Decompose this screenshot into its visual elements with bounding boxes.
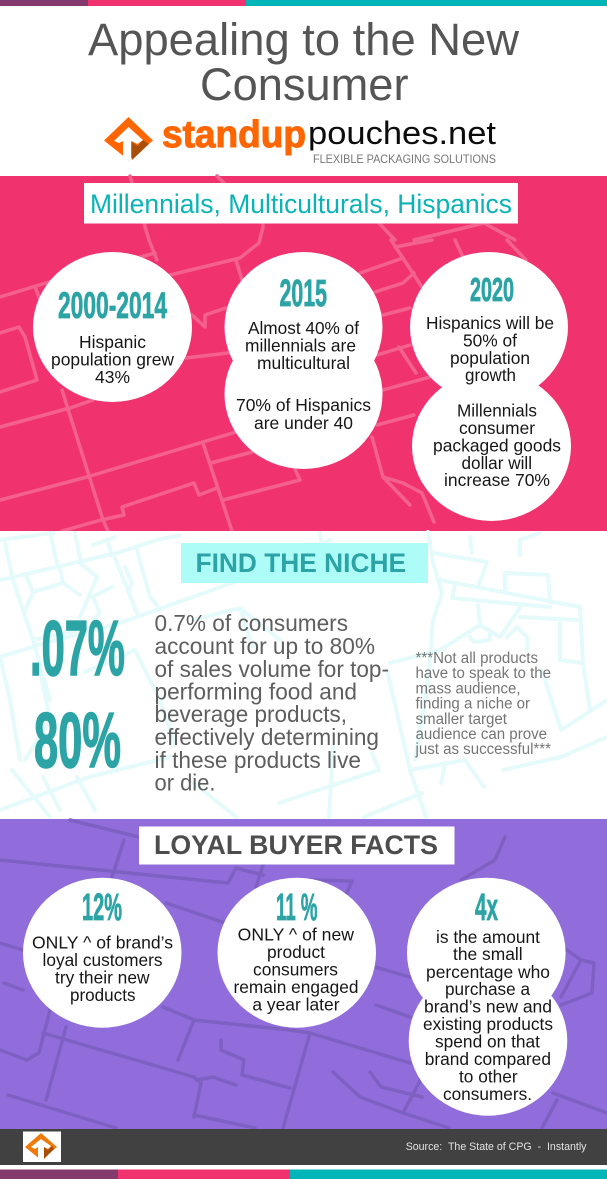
circle: 4x: is the amount (436, 927, 540, 947)
circle: 2000-2014: Hispanic (79, 332, 146, 352)
circle: 4x: purchase a (445, 979, 530, 999)
side note: smaller target (416, 711, 508, 728)
main paragraph: beverage products, (154, 701, 347, 727)
panel: millennials, multiculturals, hispanics (0, 176, 607, 531)
circle: 4x: consumers. (443, 1084, 532, 1104)
section heading: Millennials, Multiculturals, Hispanics (90, 189, 512, 219)
footer logo (23, 1132, 61, 1162)
side note (415, 650, 551, 758)
title: Consumer (200, 59, 409, 110)
side note: audience can prove (416, 726, 547, 743)
title (88, 14, 519, 110)
main paragraph: or die. (154, 770, 216, 796)
circle: 2020: population (450, 348, 530, 368)
footer (0, 1129, 607, 1165)
circle: 2000-2014: 43% (95, 367, 130, 387)
title: Appealing to the New (88, 14, 519, 65)
circle: 4x: to other (459, 1067, 518, 1087)
tagline: FLEXIBLE PACKAGING SOLUTIONS (313, 152, 496, 166)
circle: 2020: consumer (459, 418, 535, 438)
circle: 2020 (410, 252, 571, 521)
circle: 11%: remain engaged (234, 977, 358, 997)
circle: 2015: millennials are (245, 336, 356, 356)
circle: 12%: 12% (82, 887, 122, 929)
circle: 2000-2014: 2000-2014 (58, 285, 167, 326)
main paragraph: effectively determining (154, 724, 379, 750)
circle: 12%: try their new (55, 968, 150, 988)
main paragraph (154, 610, 389, 796)
circle: 4x: 4x (475, 887, 498, 929)
circle: 2015: Almost 40% of (248, 318, 359, 338)
circle: 2015: multicultural (257, 353, 350, 373)
main paragraph: of sales volume for top- (154, 656, 389, 682)
circle: 4x: brand’s new and (424, 997, 552, 1017)
circle: 11% (218, 878, 376, 1028)
stat: 80%: 80% (34, 696, 121, 784)
circle: 11%: 11 % (276, 887, 318, 929)
circle: 2000-2014 (33, 252, 192, 402)
circle: 2020: 50% of (463, 330, 517, 350)
side note: finding a niche or (416, 696, 530, 712)
stat: .07%: .07% (30, 604, 125, 692)
circle: 4x: brand compared (425, 1049, 551, 1069)
source credit: Source: The State of CPG - Instantly (406, 1141, 587, 1153)
side note: ***Not all products (416, 650, 538, 667)
circle: 12%: products (70, 985, 136, 1005)
panel: loyal buyer facts (0, 819, 607, 1129)
section heading: LOYAL BUYER FACTS (154, 830, 438, 860)
circle: 2020: Hispanics will be (426, 313, 554, 333)
circle: 2020: packaged goods (433, 436, 561, 456)
circle: 2020: Millennials (457, 400, 537, 420)
panel: find the niche (0, 531, 607, 819)
circle: 11%: ONLY ^ of new (238, 925, 354, 945)
side note: have to speak to the (416, 665, 551, 682)
circle: 2020: 2020 (470, 271, 514, 308)
main paragraph: 0.7% of consumers (154, 610, 348, 636)
circle: 12%: loyal customers (42, 950, 163, 970)
circle: 11%: product (267, 942, 325, 962)
circle: 11%: consumers (253, 960, 338, 980)
circle: 2020: dollar will (462, 453, 532, 473)
logo: standuppouches.net: pouches.net (308, 115, 496, 151)
circle: 2020: increase 70% (444, 470, 550, 490)
circle: 2015: 70% of Hispanics (236, 395, 371, 415)
circle: 11%: a year later (252, 995, 340, 1015)
main paragraph: if these products live (154, 747, 361, 773)
icon: orange diamond with arrow (104, 117, 153, 160)
circle: 2015 (224, 252, 382, 469)
section heading (181, 543, 428, 583)
side note: mass audience, (416, 680, 520, 698)
circle: 4x (407, 878, 567, 1116)
circle: 4x: the small (453, 944, 523, 964)
main paragraph: performing food and (154, 678, 357, 704)
circle: 2015: 2015 (280, 273, 327, 315)
logo: standuppouches.net (104, 114, 496, 166)
bottom colour bar (0, 1170, 607, 1179)
circle: 2015: are under 40 (254, 413, 353, 433)
wordmark: standup (162, 114, 306, 156)
circle: 12%: ONLY ^ of brand’s (32, 932, 173, 952)
side note: just as successful*** (415, 741, 551, 758)
top colour bar (0, 0, 607, 6)
circle: 4x: percentage who (426, 962, 550, 982)
section heading: FIND THE NICHE (196, 548, 406, 578)
main paragraph: account for up to 80% (154, 633, 375, 659)
circle: 2020: growth (465, 365, 516, 385)
circle: 2000-2014: population grew (51, 350, 174, 370)
circle: 12% (23, 878, 182, 1028)
circle: 4x: spend on that (435, 1032, 540, 1052)
circle: 4x: existing products (423, 1014, 553, 1034)
